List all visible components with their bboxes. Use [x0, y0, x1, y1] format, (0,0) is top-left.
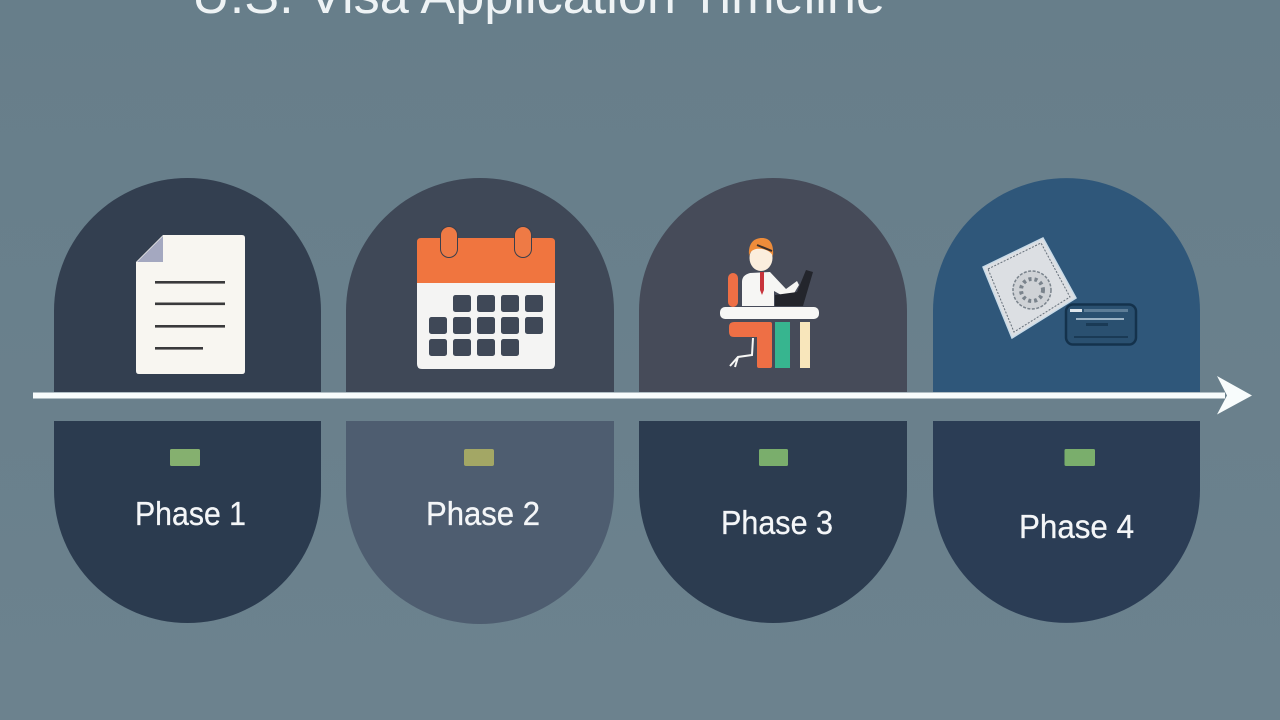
phase 1 status tab	[170, 449, 200, 466]
phase 1 lower bowl	[54, 421, 321, 623]
phase 2 lower bowl	[346, 421, 614, 624]
phase 4 upper arch	[933, 178, 1200, 392]
phase 2 upper arch	[346, 178, 614, 392]
icon: visa document and passport stamp	[983, 238, 1136, 344]
panel: phase 1	[54, 178, 321, 623]
phase 4 status tab	[1064, 449, 1095, 466]
icon: person working at desk	[720, 238, 819, 368]
panel: phase 3	[639, 178, 907, 623]
phase 1 upper arch	[54, 178, 321, 392]
phase 3 lower bowl	[639, 421, 907, 623]
phase 3 status tab	[759, 449, 788, 466]
phase 1 label: Phase 1	[135, 495, 246, 532]
panel: phase 2	[346, 178, 614, 624]
phase 2 status tab	[464, 449, 494, 466]
phase 4 lower bowl	[933, 421, 1200, 623]
phase 3 upper arch	[639, 178, 907, 392]
arrow: timeline	[33, 376, 1252, 414]
panel: phase 4	[933, 178, 1200, 623]
icon: document	[136, 235, 245, 374]
phase 2 label: Phase 2	[426, 495, 540, 532]
phase 3 label: Phase 3	[721, 504, 833, 541]
phase 4 label: Phase 4	[1019, 508, 1134, 545]
icon: calendar	[417, 226, 555, 369]
